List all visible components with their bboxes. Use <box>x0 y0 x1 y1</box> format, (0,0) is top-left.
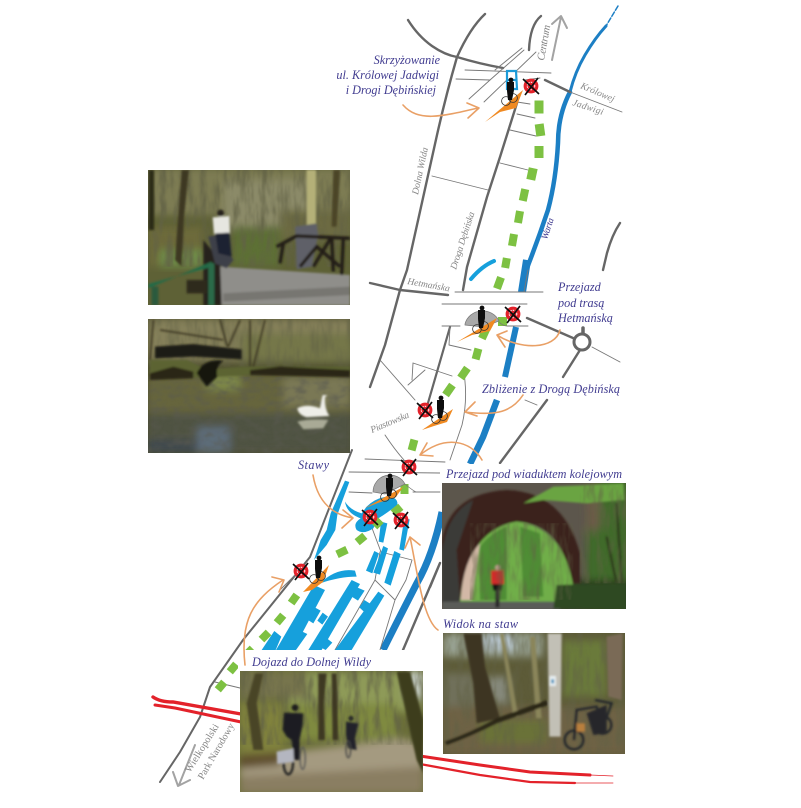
photo: railway viaduct tunnel <box>442 483 626 609</box>
street labels: Park Narodowy <box>196 721 237 782</box>
orange wedges <box>303 90 523 592</box>
photo: swan on pond <box>148 319 350 453</box>
river Warta <box>383 6 618 650</box>
ponds <box>262 481 410 650</box>
street labels: Piastowska <box>368 410 411 436</box>
arrow: Wielkopolski Park Narodowy <box>173 745 195 786</box>
white label mask <box>238 464 640 672</box>
heading: Skrzyżowanie: Skrzyżowanie <box>374 53 441 67</box>
heading: Przejazd pod trasą: Hetmańską <box>557 311 613 325</box>
heading: Zbliżenie: Zbliżenie z Drogą Dębińską <box>482 382 620 396</box>
thin streets <box>215 48 622 688</box>
no-entry icons <box>293 78 539 580</box>
blue cycle sign <box>507 71 517 89</box>
street labels <box>183 24 616 781</box>
photo: view of the pond <box>443 633 625 754</box>
heading: Stawy: Stawy <box>298 458 330 472</box>
street labels: Hetmańska <box>405 277 451 294</box>
street labels: Jadwigi <box>571 98 605 118</box>
heading: Przejazd pod trasą: Przejazd <box>557 280 602 294</box>
heading: Widok na staw: Widok na staw <box>443 617 519 631</box>
street labels: Dolna Wilda <box>411 146 431 197</box>
street labels: Królowej <box>578 81 616 105</box>
orange pointers <box>244 103 560 665</box>
cyclist icons <box>310 78 517 583</box>
arrow: Centrum <box>552 16 567 60</box>
heading: Przejazd pod wiaduktem: Przejazd pod wiaduktem kolejowym <box>445 467 622 481</box>
street labels: Wielkopolski <box>183 722 222 775</box>
heading: Skrzyżowanie: i Drogi Dębińskiej <box>346 83 437 97</box>
street labels: Warta <box>540 217 557 241</box>
photo: cyclists on forest path <box>240 671 423 792</box>
street labels: Centrum <box>535 24 553 62</box>
green dashed route <box>215 100 545 692</box>
street labels: Droga Dębińska <box>449 211 477 272</box>
heading: Skrzyżowanie: ul. Królowej Jadwigi <box>336 68 440 82</box>
red national park border <box>153 697 613 783</box>
tunnel arches <box>373 311 507 494</box>
roads <box>160 14 620 782</box>
map: cycling route <box>153 6 640 786</box>
roundabout <box>574 334 590 350</box>
heading: Przejazd pod trasą: pod trasą <box>557 296 604 310</box>
photo: cyclist on bridge <box>148 170 350 305</box>
blue pond near Hetmanska <box>471 261 494 279</box>
heading: Dojazd do Dolnej Wildy: Dojazd do Dolnej Wildy <box>251 655 372 669</box>
